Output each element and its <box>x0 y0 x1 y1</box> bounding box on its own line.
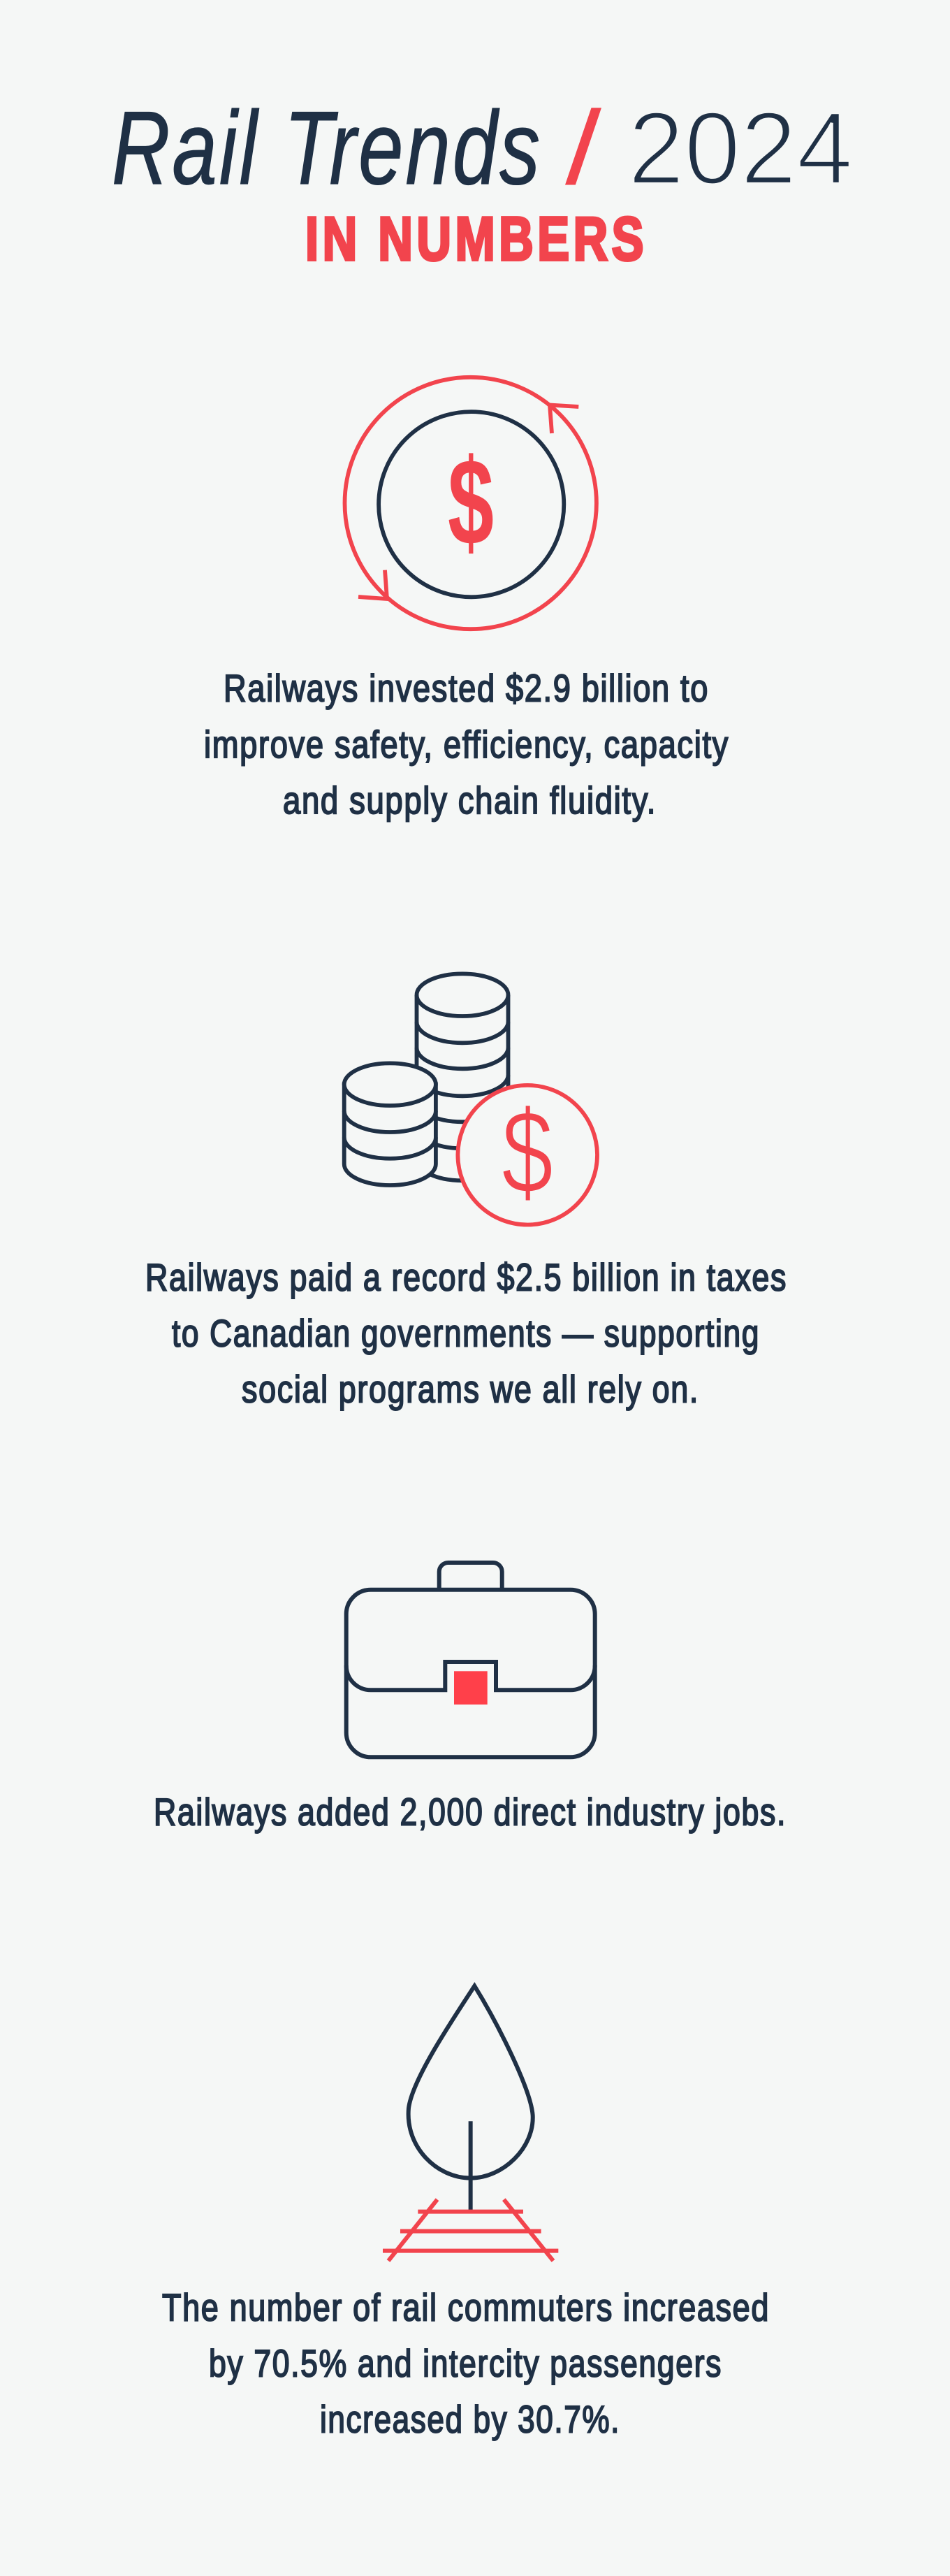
text: jobs: Railways added 2,000 direct industry jobs. <box>154 1790 787 1833</box>
text: investment: improve safety, efficiency, capacity <box>204 723 729 766</box>
text: passengers: increased by 30.7%. <box>320 2398 620 2441</box>
text: taxes <box>145 1256 787 1411</box>
title <box>112 89 853 206</box>
text: passengers: by 70.5% and intercity passengers <box>209 2342 722 2385</box>
briefcase flap <box>346 1662 595 1690</box>
text: taxes: social programs we all rely on. <box>242 1368 699 1411</box>
icon: briefcase <box>346 1563 595 1757</box>
back coin stack <box>416 974 509 1180</box>
icon: coin stacks with dollar <box>344 974 597 1224</box>
icon: tree on rail track <box>383 1986 558 2261</box>
title: slash: / <box>565 89 601 206</box>
text: passengers: The number of rail commuters increased <box>162 2286 770 2329</box>
inner coin circle <box>379 412 564 597</box>
text: investment: Railways invested $2.9 billion to <box>224 666 709 709</box>
text: taxes: to Canadian governments — supporting <box>172 1312 760 1355</box>
text: taxes: Railways paid a record $2.5 billion in taxes <box>145 1256 787 1299</box>
briefcase body <box>346 1590 595 1757</box>
rail track <box>383 2199 558 2261</box>
text: investment: and supply chain fluidity. <box>283 779 657 822</box>
section: jobs <box>154 1563 787 1833</box>
subtitle: IN NUMBERS <box>305 204 648 273</box>
section: passengers <box>162 1986 770 2441</box>
tree crown <box>409 1986 533 2178</box>
clasp <box>454 1671 488 1705</box>
briefcase handle <box>439 1563 502 1590</box>
icon: circulating dollar coin <box>345 377 597 629</box>
front coin stack <box>344 1063 436 1185</box>
tree trunk <box>465 2121 477 2210</box>
title: Rail Trends: Rail Trends <box>112 89 542 206</box>
title: year: 2024 <box>628 91 853 206</box>
text: investment <box>204 666 729 822</box>
dollar sign: $ <box>448 434 494 571</box>
text: passengers <box>162 2286 770 2441</box>
outer circular arrows <box>345 377 597 629</box>
dollar sign: $ <box>502 1086 553 1219</box>
dollar coin <box>458 1085 597 1224</box>
section: taxes <box>145 974 787 1411</box>
section: investment <box>204 377 729 822</box>
